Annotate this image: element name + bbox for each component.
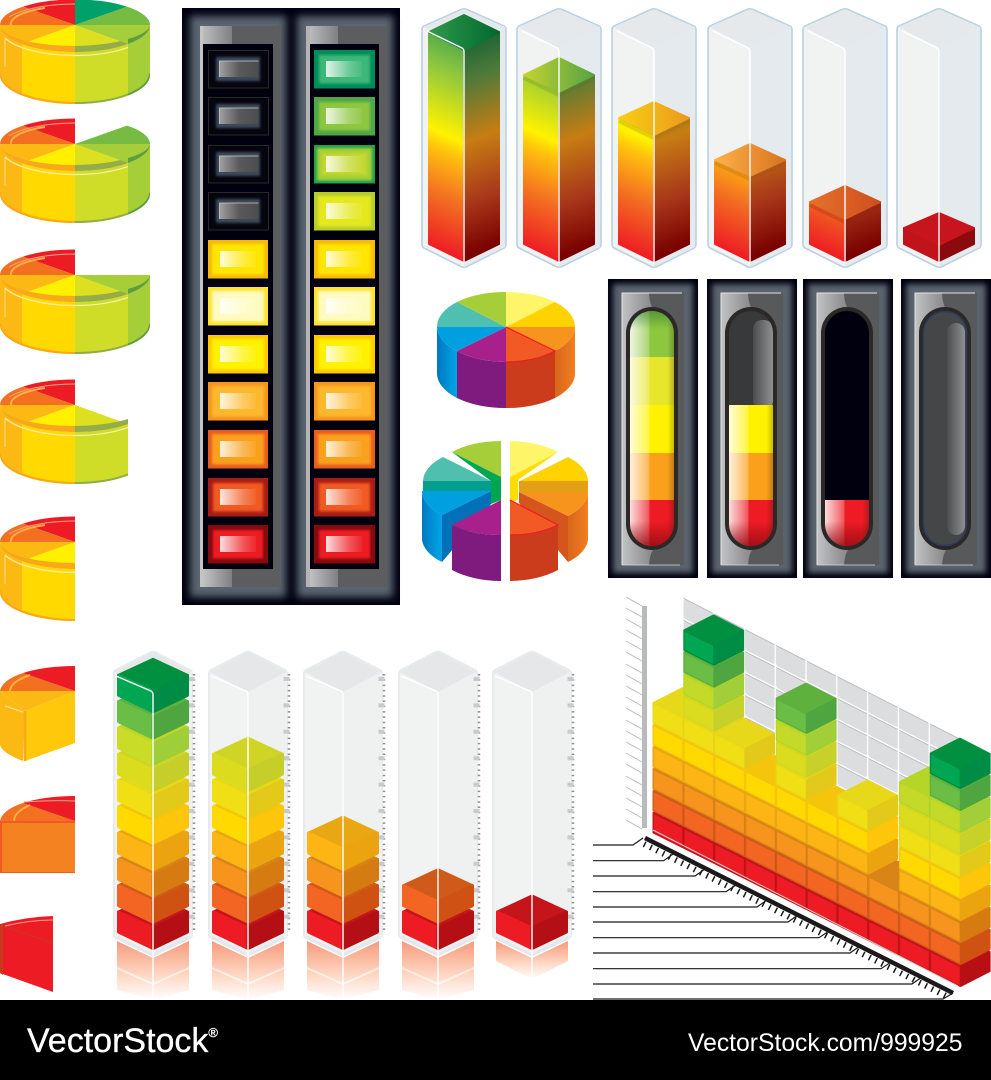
footer brand name: VectorStock [27,1022,208,1060]
glass bar 6 [897,9,981,267]
pie 5: four sectors [0,516,75,621]
glass bar 1: full [422,9,506,267]
pie 6: three sectors [0,666,75,761]
footer image URL: VectorStock.com/999925 [688,1030,962,1057]
footer band [0,1000,991,1080]
pie 8: one red sector [0,916,53,992]
capsule meter 1: full [608,279,698,578]
block stack 2: seven levels [209,652,289,1000]
exploded pie: eight separated sectors [422,441,588,581]
block stack 4: two levels [399,652,479,1000]
meter 2: fully lit cells [314,50,375,564]
block stack 1: ten levels [114,652,194,1000]
pie 3: six sectors [0,249,150,354]
block stack 5: one level [493,652,573,1000]
capsule meter 4: empty [901,279,991,578]
pie 2: seven sectors [0,118,150,223]
glass bar 4 [708,9,792,267]
capsule meter 3: one level [803,279,893,578]
meter 1: partly lit cells [208,50,268,564]
pie: eight colour sectors [437,292,575,408]
panel: LED level meters [182,8,400,605]
capsule meter 2: three levels [707,279,797,578]
glass bar 5 [803,9,887,267]
pie 4: five sectors [0,380,128,484]
pie 7: two sectors [0,796,75,873]
glass bar 3 [612,9,696,267]
glass bar 2 [517,9,601,267]
isometric bar chart [593,597,990,999]
chart columns [653,615,990,986]
vertical axis ruler [626,597,647,829]
axis label leader lines [593,838,953,999]
footer brand name: ® [208,1025,218,1040]
horizontal axis with ticks [644,830,958,997]
pie 1: full eight sectors [0,0,150,104]
block stack 3: four levels [304,652,384,1000]
chart back wall grid [683,597,958,913]
